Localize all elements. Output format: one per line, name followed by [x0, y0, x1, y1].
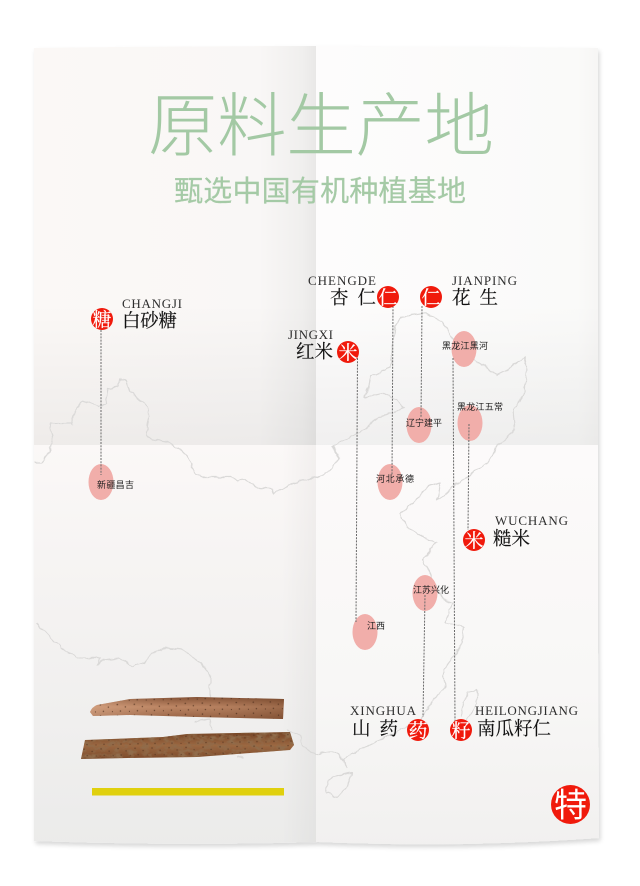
label: Wuchang brown rice	[463, 513, 568, 552]
label: Chengde apricot kernel: 仁	[378, 287, 398, 309]
label: Jianping peanut: 仁	[421, 287, 441, 309]
label: Jingxi red rice: JINGXI	[288, 327, 333, 342]
illustration: yam roots	[81, 697, 294, 759]
label: Changji white sugar: 糖	[92, 309, 112, 331]
label: Heilongjiang pumpkin seed: HEILONGJIANG	[475, 703, 578, 718]
label: Chengde apricot kernel	[308, 273, 399, 309]
dotted connector lines	[101, 306, 469, 722]
label: Changji white sugar: 白砂糖	[122, 311, 177, 332]
place labels on map: 辽宁建平	[406, 417, 442, 428]
place labels on map: 新疆昌吉	[97, 479, 134, 490]
label: Jingxi red rice: 米	[338, 342, 358, 364]
label: Wuchang brown rice: 米	[464, 530, 484, 552]
label: Xinghua yam: 药	[408, 720, 428, 742]
label: Chengde apricot kernel: CHENGDE	[308, 273, 376, 288]
label: Heilongjiang pumpkin seed: 南瓜籽仁	[477, 718, 551, 740]
subtitle: 甄选中国有机种植基地	[174, 168, 466, 210]
yellow bar	[92, 788, 284, 796]
label: Jianping peanut: JIANPING	[452, 273, 517, 288]
label: Jingxi red rice	[288, 327, 359, 364]
label: Heilongjiang pumpkin seed	[450, 703, 578, 742]
label: Changji white sugar	[91, 296, 182, 332]
special seal: 特	[554, 778, 587, 826]
place labels on map: 河北承德	[376, 473, 414, 484]
label: Heilongjiang pumpkin seed: 籽	[451, 720, 471, 742]
title: 原料生产地	[148, 70, 494, 171]
label: Changji white sugar: CHANGJI	[122, 296, 182, 311]
place labels on map: 江苏兴化	[413, 584, 449, 595]
label: Xinghua yam	[350, 703, 429, 742]
label: Chengde apricot kernel: 杏 仁	[330, 288, 376, 309]
label: Wuchang brown rice: WUCHANG	[495, 513, 568, 528]
production area blobs	[88, 331, 482, 650]
label: Wuchang brown rice: 糙米	[493, 529, 530, 550]
label: Xinghua yam: 山 药	[352, 719, 398, 740]
label: Jingxi red rice: 红米	[296, 342, 333, 363]
place labels on map: 黑龙江五常	[457, 401, 503, 412]
place labels on map	[97, 340, 503, 631]
label: Jianping peanut	[420, 273, 517, 309]
map outline of China	[35, 313, 527, 798]
label: Jianping peanut: 花 生	[452, 288, 498, 309]
place labels on map: 江西	[367, 621, 385, 631]
place labels on map: 黑龙江黑河	[442, 340, 488, 351]
label: Xinghua yam: XINGHUA	[350, 703, 417, 718]
